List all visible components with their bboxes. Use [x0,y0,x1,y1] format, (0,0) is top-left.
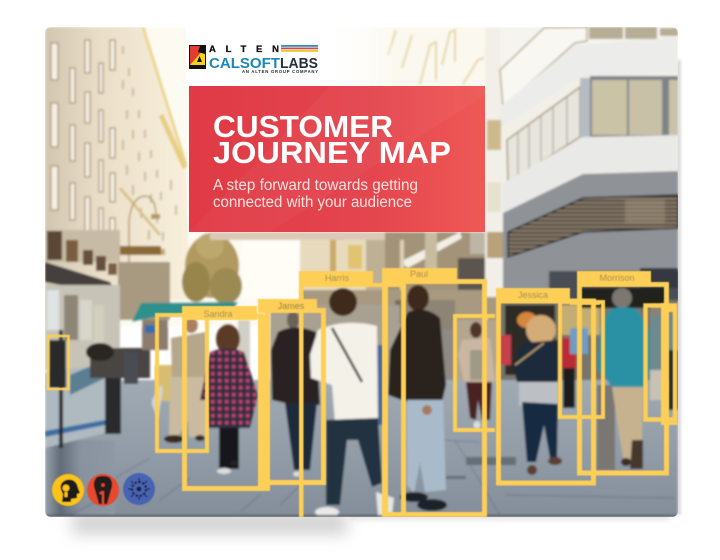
upper white band [501,38,676,109]
box: Paul [382,268,484,517]
right building [485,27,679,301]
icon: split head puzzle [87,474,119,506]
subtitle: connected with your audience [213,194,412,211]
person in dark coat [271,311,320,476]
grey fascia [503,171,678,300]
older man in teal jacket [596,287,651,470]
logo mark: ALTEN [190,66,205,70]
far right passer-by [650,315,678,410]
second glass row [507,87,580,183]
icon: head with lightbulb [52,474,84,506]
woman in checked coat [200,324,258,474]
card drop shadow [72,60,680,534]
box: Sandra [182,306,270,491]
box: Paul: Paul [410,269,428,279]
title panel [189,86,485,232]
upper pale building above panel [386,28,485,86]
side windows [487,120,501,150]
box: far right figures [646,303,678,425]
logo colour stripes [281,45,318,52]
shopfronts behind crowd [270,288,678,385]
street lamp and brown sign [118,194,166,263]
icon: cog network [123,473,155,505]
box: Jessica: Jessica [518,290,548,300]
title: JOURNEY MAP [213,135,451,170]
box: James [258,299,324,482]
box: woman with maroon trousers [455,316,495,430]
logo wordmark bottom: CALSOFT [209,56,280,72]
logo: Alten Calsoft Labs [189,44,318,74]
logo tagline: AN ALTEN GROUP COMPANY [242,69,318,74]
box: small left figure [48,336,68,389]
tracking boxes [48,268,678,517]
box: Jessica [496,288,600,483]
box: red-top passer-by [560,302,603,417]
man in dark jacket and jeans [388,285,447,511]
background crowd [86,302,511,425]
pavement [45,380,678,517]
logo wordmark top: ALTEN [209,44,279,55]
left storefront upper [45,230,170,320]
box: man in beige [157,315,207,451]
centre buildings along street [210,232,503,340]
white wash behind logo [186,27,392,87]
left storefront glass and pillar [45,285,121,448]
woman with blonde hair [513,315,562,475]
box: Harris [299,271,406,517]
top glass row [500,27,587,107]
tree in the distance [180,232,243,304]
photo: street scene [45,27,679,517]
bottom edge [45,515,678,517]
box: Morrison: Morrison [599,273,635,283]
pole [597,385,615,470]
title: CUSTOMER [213,109,393,144]
box: Sandra: Sandra [203,309,233,319]
louvres [508,195,678,257]
lower white band [503,135,678,213]
sky and distant haze [121,28,464,329]
woman with maroon trousers [458,322,495,429]
logo wordmark labs: LABS [280,56,318,72]
subtitle: A step forward towards getting [213,177,418,194]
red-top passer-by [562,328,588,408]
box: James: James [278,301,305,311]
man in beige [164,317,208,443]
left building [45,27,190,300]
box: Harris: Harris [325,273,349,283]
box: Morrison [577,271,666,473]
man in white sweater [310,288,394,517]
